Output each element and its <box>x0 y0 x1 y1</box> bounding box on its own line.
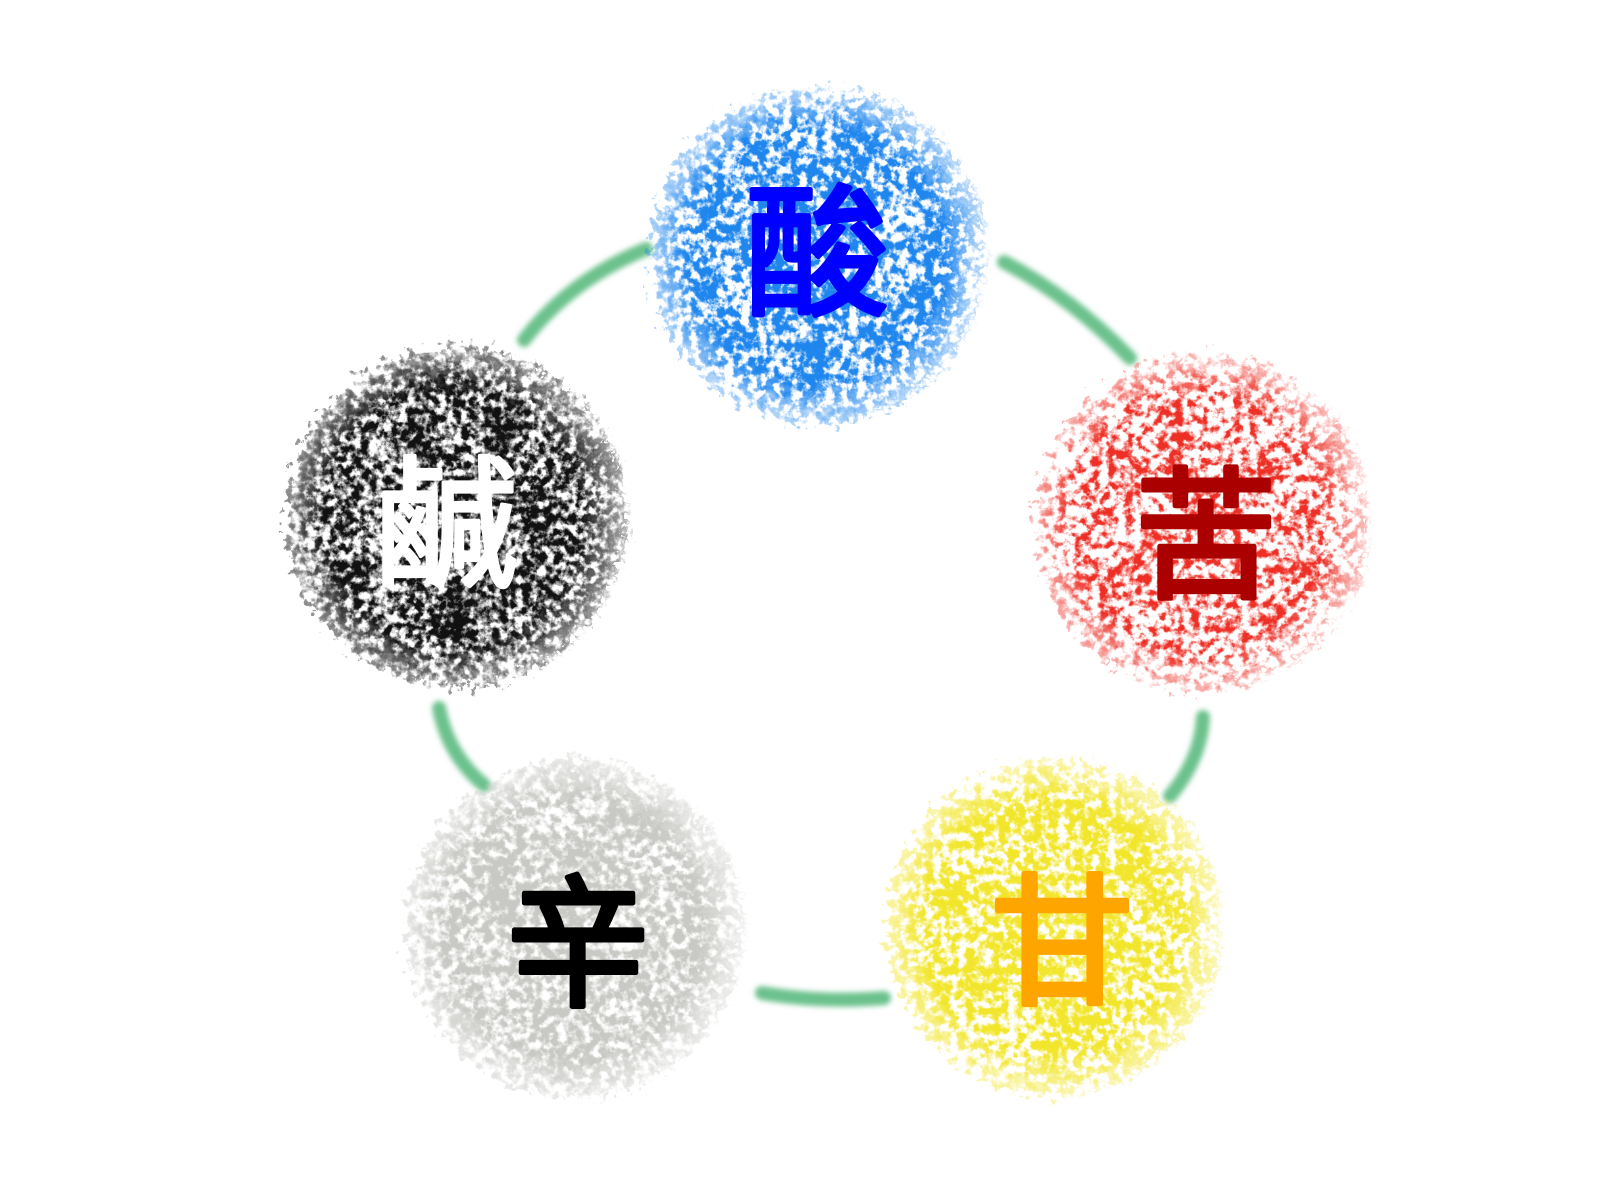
node: sour <box>652 87 988 423</box>
node: salty: 鹹 <box>374 448 518 607</box>
node: sweet <box>888 759 1224 1095</box>
node: pungent <box>407 759 745 1097</box>
node: bitter <box>1037 355 1373 691</box>
node: sweet: 甘 <box>990 865 1134 1024</box>
node: salty <box>288 347 628 687</box>
arrow arcs: connecting green strokes <box>439 249 1203 1000</box>
node: sour: 酸 <box>746 176 888 335</box>
node: pungent: 辛 <box>506 867 650 1026</box>
node: bitter: 苦 <box>1134 459 1278 618</box>
